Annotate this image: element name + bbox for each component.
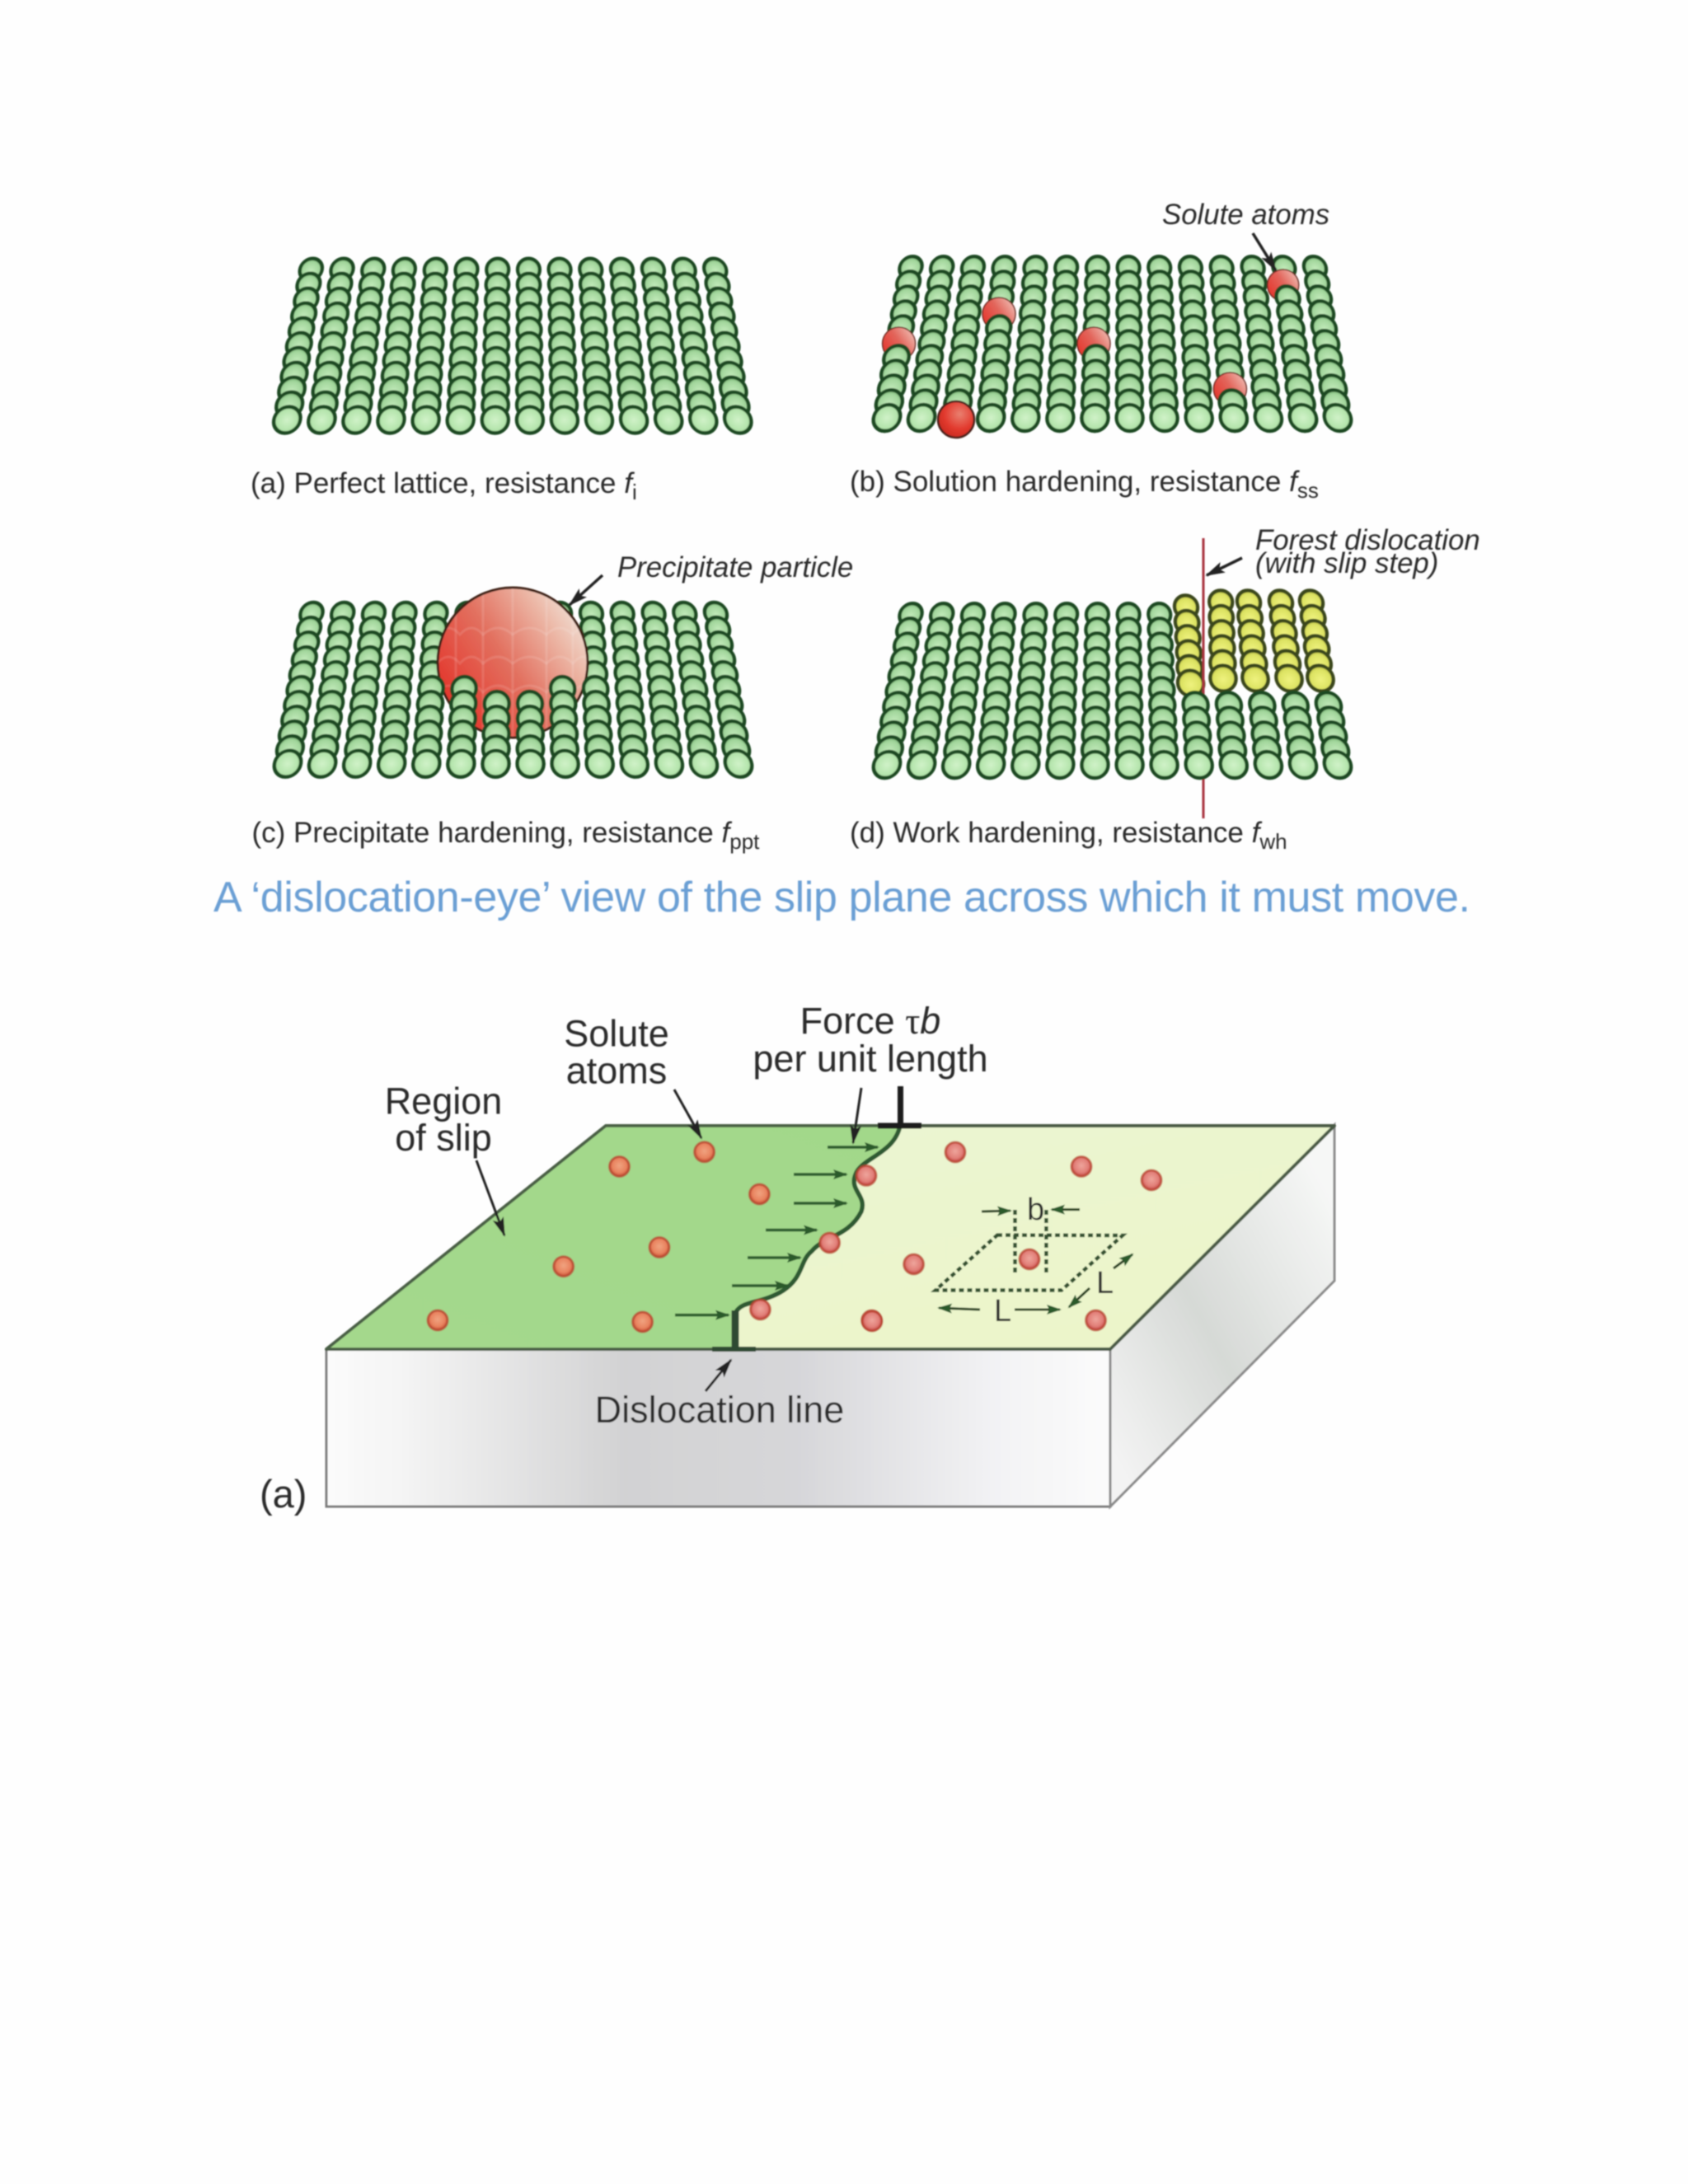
lower green lattice rows — [1182, 692, 1353, 778]
block front face — [326, 1349, 1110, 1507]
label: force per unit length: Force τb — [800, 1000, 940, 1042]
caption (a): i — [632, 480, 637, 504]
part label (a): (a) — [260, 1472, 307, 1516]
label: b: b — [1027, 1193, 1044, 1227]
caption (c): ppt — [729, 829, 760, 854]
caption (b): (b) Solution hardening, resistance f — [850, 466, 1297, 498]
spacing cell arrows — [939, 1210, 1132, 1310]
arrow: force — [853, 1088, 861, 1143]
caption (c): (c) Precipitate hardening, resistance f — [252, 817, 729, 849]
force arrows on dislocation — [675, 1147, 878, 1315]
label: solute atoms: Solute — [564, 1012, 669, 1055]
dislocation line — [712, 1086, 921, 1349]
panel: perfect lattice — [251, 259, 753, 504]
caption (d): wh — [1259, 829, 1287, 854]
panel: solution hardening — [850, 199, 1353, 503]
lattice of atoms (b) — [871, 256, 1353, 431]
arrow: solute atoms — [1253, 233, 1276, 270]
heading: dislocation-eye view: A ‘dislocation-eye’ view of the slip plane across which it must move. — [213, 874, 1470, 921]
lattice of atoms (c) behind particle — [272, 602, 753, 777]
arrow: forest dislocation — [1207, 558, 1242, 575]
spacing cell: dashed L by L square with b width — [935, 1210, 1123, 1291]
shifted yellow atoms (slip step) — [1173, 590, 1334, 696]
front lattice rows over particle — [412, 677, 614, 777]
label: forest dislocation: (with slip step) — [1255, 547, 1438, 579]
panel: work hardening — [850, 524, 1480, 854]
left green lattice columns — [871, 603, 1178, 778]
panel: precipitate hardening — [252, 551, 853, 854]
precipitate particle — [437, 585, 589, 742]
arrow: solute atoms — [674, 1090, 701, 1138]
label: region of slip: of slip — [395, 1117, 492, 1159]
label: dislocation line: Dislocation line — [595, 1389, 844, 1431]
label: forest dislocation: Forest dislocation — [1255, 524, 1480, 556]
block side face — [1110, 1125, 1334, 1507]
lattice of atoms (a) — [272, 259, 753, 434]
label: solute atoms: atoms — [566, 1050, 667, 1091]
solute atoms on slip plane — [428, 1142, 1161, 1332]
solute atoms embedded in lattice — [871, 269, 1318, 438]
label: force per unit length: per unit length — [753, 1038, 988, 1080]
arrow: precipitate particle — [570, 575, 603, 605]
forest dislocation line — [1202, 538, 1205, 818]
arrow: dislocation line — [706, 1360, 731, 1391]
caption (b): ss — [1297, 478, 1319, 503]
top face: region of slip — [326, 1126, 900, 1349]
panel: slip plane block diagram — [260, 1000, 1334, 1516]
label: L front: L — [994, 1294, 1011, 1329]
label: precipitate particle: Precipitate particle — [617, 551, 853, 583]
top face: unslipped region — [326, 1126, 1334, 1349]
caption (a): (a) Perfect lattice, resistance f — [251, 467, 632, 499]
label: L side: L — [1096, 1266, 1114, 1301]
label: solute atoms: Solute atoms — [1162, 199, 1329, 231]
caption (d): (d) Work hardening, resistance f — [850, 817, 1259, 849]
arrow: region of slip — [476, 1160, 504, 1235]
label: region of slip: Region — [385, 1080, 502, 1122]
